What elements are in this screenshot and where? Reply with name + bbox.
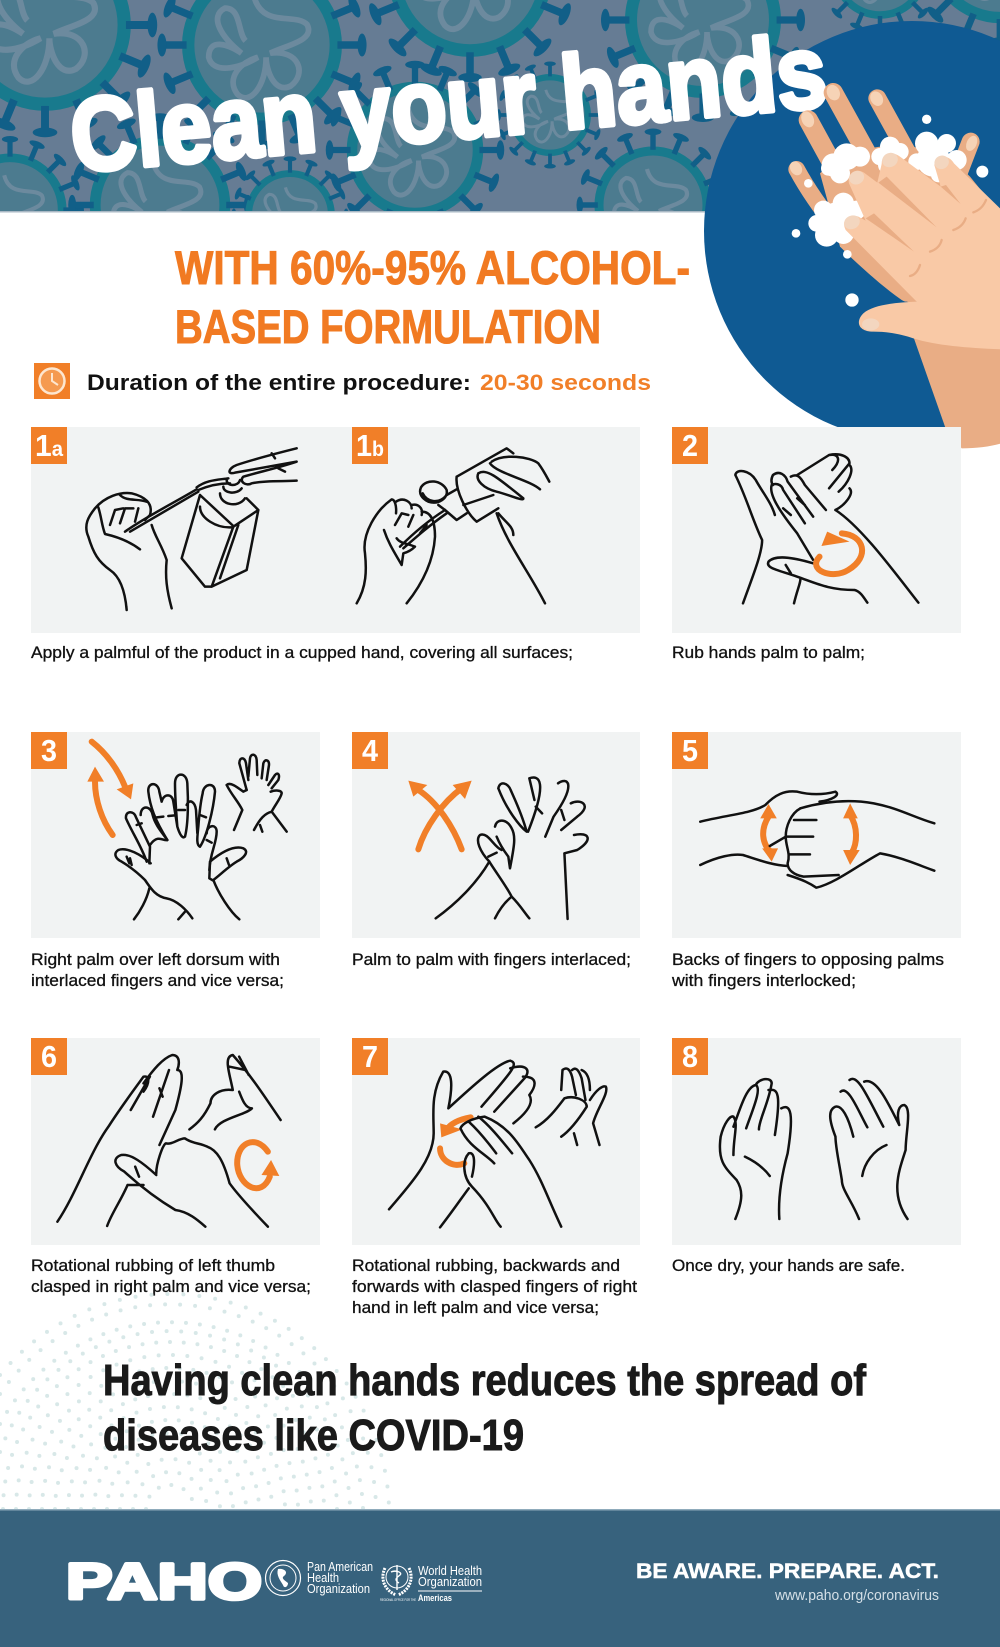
badge 6: 6 (41, 1039, 57, 1074)
panel: step 7 (352, 1038, 640, 1245)
WHO name: REGIONAL OFFICE FOR THE (380, 1597, 416, 1602)
illustration: pump bottle into hand (86, 448, 297, 610)
illustration: backs of fingers (700, 791, 934, 888)
website: www.paho.org/coronavirus (774, 1587, 939, 1604)
closing statement (103, 1356, 866, 1460)
panel: step 3 (31, 732, 320, 938)
caption 3 (31, 951, 284, 990)
illustration: dry open hands (720, 1079, 908, 1219)
icon: clock (34, 363, 70, 399)
PAHO name: Health (307, 1571, 339, 1585)
subtitle (175, 241, 690, 353)
illustration: fingers interlaced (408, 778, 588, 919)
icon: WHO emblem (383, 1565, 411, 1595)
caption 8: Once dry, your hands are safe. (672, 1257, 905, 1275)
caption 2: Rub hands palm to palm; (672, 644, 865, 662)
caption 5 (671, 951, 944, 990)
badge 2: 2 (682, 428, 698, 463)
badge 3 (31, 732, 67, 769)
badge 8: 8 (682, 1039, 698, 1074)
caption 7: Rotational rubbing, backwards and (352, 1257, 620, 1275)
badge 1b: 1b (356, 428, 384, 463)
illustration: palm to palm (735, 454, 918, 603)
caption 6 (31, 1257, 311, 1296)
PAHO name (307, 1560, 373, 1596)
illustration: hands washing with foam (787, 83, 1000, 448)
illustration: thumb rubbing (57, 1055, 281, 1227)
badge 7 (352, 1038, 388, 1075)
WHO name: Organization (418, 1575, 482, 1589)
WHO name (380, 1564, 482, 1604)
footer (0, 1509, 1000, 1647)
caption 3: Right palm over left dorsum with (31, 951, 280, 969)
panel: step 6 (31, 1038, 320, 1245)
panel: step 8 (672, 1038, 961, 1245)
duration text: Duration of the entire procedure: (87, 370, 471, 395)
caption 7: hand in left palm and vice versa; (352, 1299, 599, 1317)
subtitle: BASED FORMULATION (175, 300, 601, 353)
caption 3: interlaced fingers and vice versa; (31, 972, 284, 990)
badge 4: 4 (362, 733, 379, 768)
badge 5 (672, 732, 708, 769)
subtitle: WITH 60%-95% ALCOHOL- (175, 241, 690, 294)
blue circle (704, 21, 1000, 441)
badge 3: 3 (41, 733, 57, 768)
PAHO wordmark: PAHO (66, 1553, 262, 1610)
PAHO name: Organization (307, 1582, 370, 1596)
illustration: fingertips rubbing palm (389, 1061, 606, 1227)
icon: PAHO globe emblem (266, 1560, 300, 1596)
caption 7 (352, 1257, 637, 1317)
title: Clean your hands (66, 13, 831, 195)
panel: step 5 (672, 732, 961, 938)
badge 8 (672, 1038, 708, 1075)
closing statement: Having clean hands reduces the spread of (103, 1356, 866, 1405)
caption 1: Apply a palmful of the product in a cupped hand, covering all surfaces; (31, 644, 573, 662)
panel: step 1a and 1b (31, 427, 640, 633)
caption 4: Palm to palm with fingers interlaced; (352, 951, 631, 969)
tagline: BE AWARE. PREPARE. ACT. (636, 1560, 939, 1583)
decorative dots field (0, 1294, 389, 1509)
banner: virus pattern background (0, 0, 1000, 297)
badge 7: 7 (362, 1039, 378, 1074)
panel: step 2 (672, 427, 961, 633)
badge 1a: 1a (35, 428, 63, 463)
caption 5: with fingers interlocked; (671, 972, 856, 990)
closing statement: diseases like COVID-19 (103, 1411, 524, 1460)
caption 6: Rotational rubbing of left thumb (31, 1257, 275, 1275)
WHO name: World Health (418, 1564, 482, 1578)
panel: step 4 (352, 732, 640, 938)
PAHO name: Pan American (307, 1560, 373, 1574)
badge 6 (31, 1038, 67, 1075)
badge 2 (672, 427, 708, 464)
caption 5: Backs of fingers to opposing palms (672, 951, 944, 969)
WHO name: Americas (418, 1593, 452, 1604)
illustration: right palm over left dorsum (87, 742, 287, 919)
badge 5: 5 (682, 733, 698, 768)
badge 4 (352, 732, 388, 769)
caption 6: clasped in right palm and vice versa; (31, 1278, 311, 1296)
duration value: 20-30 seconds (480, 370, 651, 395)
caption 7: forwards with clasped fingers of right (352, 1278, 637, 1296)
illustration: bottle squeezed into hand (357, 448, 549, 603)
